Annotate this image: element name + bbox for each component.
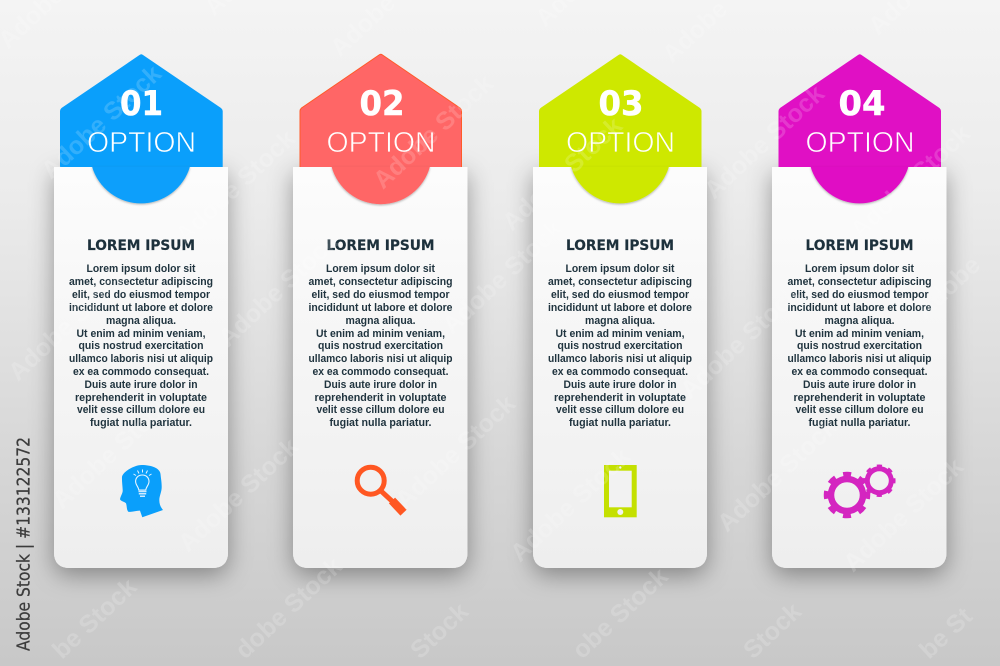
body text: reprehenderit in voluptate [794,392,926,404]
watermark: repeated stock marks: be Stock [47,573,142,664]
body text: quis nostrud exercitation [318,340,443,352]
body text: Duis aute irure dolor in [564,379,677,391]
watermark: repeated stock marks: Adobe Stock [497,112,628,236]
heading: LOREM IPSUM [87,238,195,254]
watermark: repeated stock marks: Adobe Stock [213,228,344,352]
body text: quis nostrud exercitation [558,340,683,352]
coral pentagon header [300,54,462,170]
icon: head with light bulb [120,465,163,517]
heading: LOREM IPSUM [326,238,434,254]
body text: reprehenderit in voluptate [314,392,446,404]
number 03: 03 [598,84,644,124]
watermark: repeated stock marks: Adobe [910,251,986,324]
body text: Duis aute irure dolor in [324,379,437,391]
body text: Lorem ipsum dolor sit [566,263,675,275]
heading: LOREM IPSUM [806,238,914,254]
option 02 card [293,167,468,568]
number 02: 02 [360,84,404,124]
body text [69,263,213,429]
body text: incididunt ut labore et dolore [788,302,932,314]
blue tab [92,166,190,203]
body text: ullamco laboris nisi ut aliquip [69,353,213,365]
panel: option 01 [54,54,228,568]
body text: ex ea commodo consequat. [792,366,928,378]
body text: incididunt ut labore et dolore [308,302,452,314]
watermark: repeated stock marks: Adobe Stock [699,80,830,204]
body text: elit, sed do eiusmod tempor [790,289,929,301]
body text: velit esse cillum dolore eu [796,404,924,416]
body text: ullamco laboris nisi ut aliquip [308,353,453,365]
body text: fugiat nulla pariatur. [569,417,671,429]
body text: velit esse cillum dolore eu [77,404,205,416]
body text: fugiat nulla pariatur. [90,417,192,429]
body text: elit, sed do eiusmod tempor [312,289,450,301]
body text: ex ea commodo consequat. [312,366,448,378]
option 04 card [772,167,946,568]
body text: fugiat nulla pariatur. [808,417,910,429]
option 01 card [54,167,228,568]
magenta pentagon header [778,54,941,170]
body text: Ut enim ad minim veniam, [556,328,684,340]
option label: OPTION [326,127,436,159]
watermark: repeated stock marks: Adobe Stock [838,453,969,577]
body text [308,263,453,429]
body text: amet, consectetur adipiscing [548,276,692,288]
watermark: repeated stock marks: Adobe Stock [390,390,521,514]
body text: Duis aute irure dolor in [803,379,916,391]
option 03 card [533,167,707,568]
icon: magnifying glass [357,467,404,513]
body text: elit, sed do eiusmod tempor [551,289,690,301]
body text: amet, consectetur adipiscing [308,276,452,288]
watermark: repeated stock marks: Adobe Stock [845,120,976,244]
stock id vertical text: Adobe Stock | #133122572 [14,437,34,651]
body text: velit esse cillum dolore eu [556,404,684,416]
body text: magna aliqua. [106,315,176,327]
body text: incididunt ut labore et dolore [69,302,213,314]
watermark: repeated stock marks: Adobe Stock [505,443,636,567]
body text: reprehenderit in voluptate [75,392,207,404]
body text: velit esse cillum dolore eu [316,404,444,416]
body text: Ut enim ad minim veniam, [76,328,206,340]
heading: LOREM IPSUM [566,238,674,254]
body text: incididunt ut labore et dolore [548,302,692,314]
body text: Lorem ipsum dolor sit [805,263,914,275]
watermark: repeated stock marks: Adobe Stock [3,262,134,386]
body text: magna aliqua. [824,315,894,327]
option label: OPTION [806,127,914,159]
body text: fugiat nulla pariatur. [330,417,432,429]
watermark: repeated stock marks: Adobe Stock [437,215,568,339]
body text: Duis aute irure dolor in [84,379,198,391]
watermark: repeated stock marks: Adobe Stock [170,125,301,249]
body text: ullamco laboris nisi ut aliquip [788,353,932,365]
watermark: repeated stock marks: Adobe Stock [47,390,178,514]
body text: amet, consectetur adipiscing [69,276,213,288]
panel: option 02 [293,54,468,568]
body text: Ut enim ad minim veniam, [795,328,924,340]
lime tab [571,166,669,203]
panel: option 03 [533,54,707,568]
number 01: 01 [120,84,163,124]
body text: quis nostrud exercitation [78,340,204,352]
panel: option 04 [772,54,946,568]
body text: Ut enim ad minim veniam, [316,328,445,340]
watermark: repeated stock marks: Stock [405,597,474,664]
body text: magna aliqua. [585,315,655,327]
option label: OPTION [566,127,675,159]
body text: Lorem ipsum dolor sit [326,263,435,275]
body text: Lorem ipsum dolor sit [86,263,196,275]
watermark: repeated stock marks: Adobe Stock [368,70,499,194]
option label: OPTION [87,127,196,159]
body text [548,263,692,429]
icon: gears [826,466,894,516]
blue pentagon header [60,54,223,170]
body text: magna aliqua. [346,315,416,327]
watermark: repeated stock marks: obe Stock [567,562,674,664]
body text: elit, sed do eiusmod tempor [72,289,211,301]
watermark: repeated stock marks: Adobe Stock [173,433,304,557]
body text: ullamco laboris nisi ut aliquip [548,353,692,365]
body text: quis nostrud exercitation [797,340,922,352]
icon: smartphone [604,465,637,517]
watermark: repeated stock marks: dobe Stock [230,552,348,664]
watermark: repeated stock marks: Adobe Stock [675,280,806,404]
magenta tab [810,166,908,203]
body text: reprehenderit in voluptate [554,392,686,404]
number 04: 04 [838,84,886,124]
body text [788,263,932,429]
watermark: repeated stock marks: Stock [738,597,807,664]
body text: ex ea commodo consequat. [73,366,209,378]
watermark: repeated stock marks: Adobe Stock [712,413,843,537]
watermark: repeated stock marks: be St [914,602,978,664]
body text: ex ea commodo consequat. [552,366,688,378]
body text: amet, consectetur adipiscing [788,276,932,288]
lime pentagon header [539,54,702,170]
watermark: repeated stock marks: Adobe Stock [36,60,167,184]
coral tab [332,166,430,204]
